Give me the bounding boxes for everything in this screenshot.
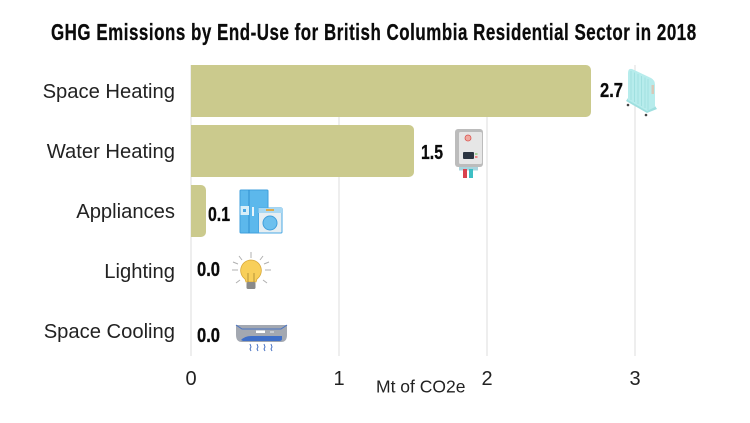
- bar chart: [191, 65, 591, 237]
- category labels: Appliances: [76, 201, 175, 223]
- category labels: [43, 81, 175, 343]
- icon: radiator: [626, 69, 657, 116]
- value labels: [197, 79, 623, 347]
- icon: air conditioner: [236, 325, 287, 351]
- x axis tick labels: [185, 368, 641, 390]
- bar: water heating: [191, 125, 414, 177]
- category labels: Water Heating: [47, 141, 175, 163]
- icon: fridge and washing machine: [240, 190, 282, 233]
- value labels: 0.0: [197, 258, 220, 281]
- title: GHG Emissions by End-Use for British Columbia Residential Sector in 2018: [51, 19, 696, 46]
- x axis tick labels: 2: [481, 368, 493, 390]
- value labels: 2.7: [600, 79, 623, 102]
- x axis tick labels: 0: [185, 368, 197, 390]
- bar: space heating: [191, 65, 591, 117]
- icon: water heater: [455, 129, 483, 178]
- value labels: 0.1: [208, 203, 230, 226]
- category labels: Lighting: [104, 261, 175, 283]
- x axis tick labels: 1: [333, 368, 345, 390]
- bar: appliances: [191, 185, 206, 237]
- icon: light bulb: [232, 252, 271, 289]
- category labels: Space Heating: [43, 81, 175, 103]
- x axis title: Mt of CO2e: [376, 376, 465, 396]
- x axis tick labels: 3: [629, 368, 641, 390]
- value labels: 0.0: [197, 324, 220, 347]
- value labels: 1.5: [421, 141, 443, 164]
- category labels: Space Cooling: [44, 321, 175, 343]
